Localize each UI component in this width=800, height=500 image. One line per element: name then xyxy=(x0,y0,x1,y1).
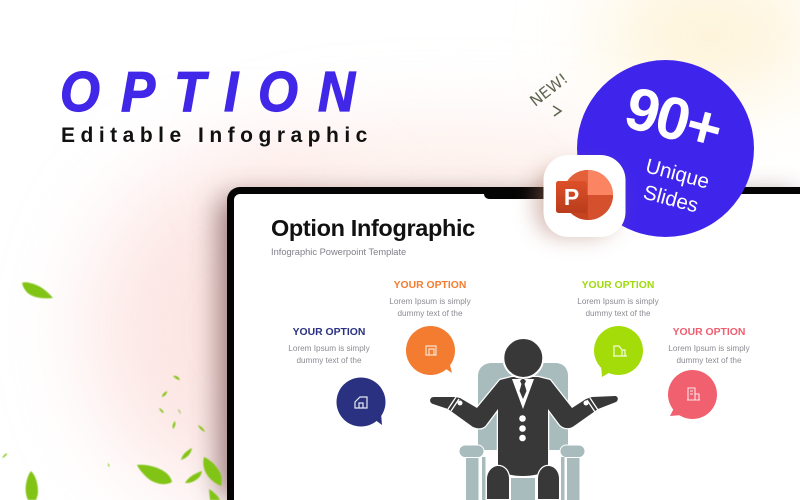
slide subheading: Infographic Powerpoint Template xyxy=(271,247,406,257)
heading: YOUR OPTION xyxy=(394,280,466,291)
option: red xyxy=(668,327,750,419)
text: dummy text of the xyxy=(676,356,742,364)
frame notch xyxy=(484,190,554,199)
heading: YOUR OPTION xyxy=(673,327,745,338)
title: O xyxy=(60,60,100,124)
text: dummy text of the xyxy=(585,308,651,318)
text: Lorem Ipsum is simply xyxy=(577,297,659,306)
speech bubble xyxy=(594,326,643,377)
title: P xyxy=(121,60,155,124)
text: Lorem Ipsum is simply xyxy=(389,297,471,306)
chair xyxy=(459,363,585,500)
badge text: Unique Slides xyxy=(641,154,712,217)
title: I xyxy=(224,60,238,124)
suit: torso and arms xyxy=(430,377,618,476)
option: navy xyxy=(288,327,386,426)
title: O xyxy=(258,60,298,124)
speech bubble xyxy=(336,378,386,426)
text: Lorem Ipsum is simply xyxy=(288,344,370,353)
head xyxy=(503,338,543,378)
text xyxy=(389,297,471,318)
text: Lorem Ipsum is simply xyxy=(668,344,750,353)
laptop screen frame xyxy=(227,187,800,500)
title: N xyxy=(318,60,355,124)
badge text: Unique Slides: Slides xyxy=(641,181,701,217)
text xyxy=(668,344,750,364)
badge text: Unique Slides: Unique xyxy=(643,154,712,193)
speech bubble xyxy=(406,326,455,375)
arrow: NEW pointer xyxy=(552,105,562,116)
title xyxy=(60,60,356,124)
slide heading: Option Infographic xyxy=(271,215,475,241)
buttons xyxy=(519,415,526,422)
subtitle: Editable Infographic xyxy=(61,124,373,147)
text: dummy text of the xyxy=(397,308,463,318)
text xyxy=(577,297,659,318)
PowerPoint icon xyxy=(523,155,628,249)
blue badge xyxy=(577,60,754,237)
heading: YOUR OPTION xyxy=(293,327,365,338)
shirt and tie xyxy=(512,379,534,409)
title: T xyxy=(174,60,205,124)
heading: YOUR OPTION xyxy=(582,280,654,291)
leaves xyxy=(2,281,222,500)
legs xyxy=(487,466,559,499)
cuffs xyxy=(448,397,598,412)
option: green xyxy=(577,280,659,377)
PowerPoint icon: P xyxy=(564,184,579,210)
option: orange xyxy=(389,280,471,375)
text xyxy=(288,344,370,364)
badge text: 90+: 90+ xyxy=(618,74,728,163)
speech bubble xyxy=(668,370,717,419)
figure: man in suit on chair xyxy=(430,339,618,500)
NEW annotation: NEW! xyxy=(527,70,571,110)
text: dummy text of the xyxy=(296,356,362,364)
